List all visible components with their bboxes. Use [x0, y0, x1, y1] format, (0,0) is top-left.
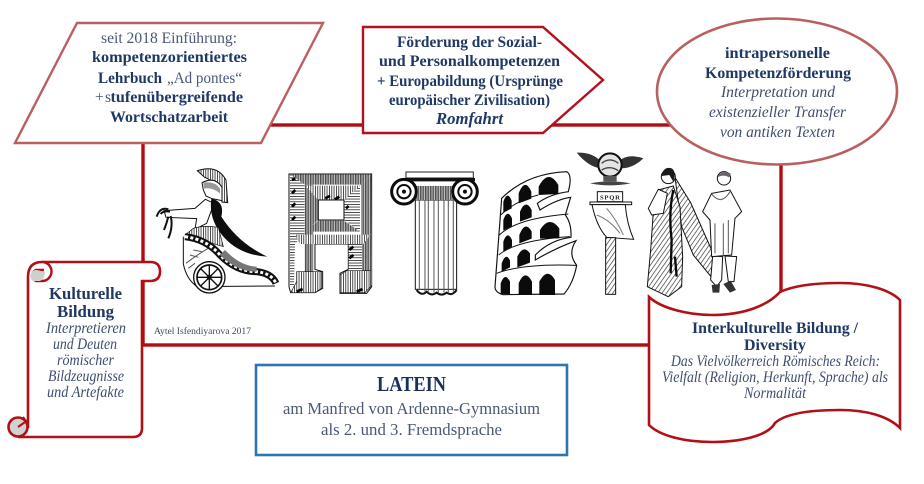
panel: LATEIN title box	[256, 365, 567, 455]
panel: intrapersonelle Kompetenzförderung ellipse	[657, 18, 897, 164]
illustration: LATEIN letters	[157, 153, 742, 297]
panel: Sozial- und Personalkompetenzen arrow: Förderung der Sozial-	[397, 34, 542, 51]
panel: Lehrbuch parallelogram	[15, 23, 323, 143]
panel: Lehrbuch parallelogram: tufenübergreifende	[110, 89, 243, 106]
panel: Lehrbuch parallelogram: +	[95, 89, 104, 106]
panel: intrapersonelle Kompetenzförderung ellipse: Kompetenzförderung	[705, 65, 851, 82]
panel: Kulturelle Bildung scroll: und Deuten	[53, 336, 117, 353]
letter I: SPQR signum: SPQR	[600, 194, 620, 201]
panel: LATEIN title box: als 2. und 3. Fremdsprache	[321, 420, 502, 439]
panel: Kulturelle Bildung scroll: Kulturelle	[49, 284, 122, 303]
letter T: ionic column	[392, 172, 477, 295]
letter N: Roman woman and man	[647, 168, 742, 297]
credit line: Aytel Isfendiyarova 2017	[154, 326, 251, 337]
letter I: SPQR signum	[577, 153, 643, 294]
panel: Interkulturelle Bildung wave: Das Vielvölkerreich Römisches Reich:	[670, 353, 880, 370]
panel: Kulturelle Bildung scroll: römischer	[57, 352, 115, 369]
panel: intrapersonelle Kompetenzförderung ellipse: Interpretation und	[720, 84, 835, 101]
panel: Kulturelle Bildung scroll: und Artefakte	[47, 384, 124, 401]
panel: LATEIN title box: LATEIN	[377, 372, 446, 396]
panel: Interkulturelle Bildung wave: Vielfalt (Religion, Herkunft, Sprache) als	[662, 369, 888, 386]
panel: Interkulturelle Bildung wave: Interkulturelle Bildung /	[692, 320, 859, 337]
panel: intrapersonelle Kompetenzförderung ellipse: existenzieller Transfer	[709, 104, 847, 121]
central frame	[143, 125, 781, 345]
panel: LATEIN title box: am Manfred von Ardenne-Gymnasium	[283, 399, 540, 418]
panel: Sozial- und Personalkompetenzen arrow: + Europabildung (Ursprünge	[377, 73, 563, 90]
panel: Kulturelle Bildung scroll: Bildung	[57, 302, 114, 321]
panel: Sozial- und Personalkompetenzen arrow: europäischer Zivilisation)	[389, 92, 550, 109]
panel: Kulturelle Bildung scroll: Bildzeugnisse	[48, 368, 124, 385]
panel: Kulturelle Bildung scroll: Interpretieren	[45, 320, 126, 337]
letter A: architectural block	[289, 174, 372, 293]
panel: Lehrbuch parallelogram: Lehrbuch	[98, 70, 162, 87]
panel: Lehrbuch parallelogram: „Ad pontes“	[167, 70, 242, 87]
panel: intrapersonelle Kompetenzförderung ellipse: von antiken Texten	[720, 124, 835, 141]
panel: Interkulturelle Bildung wave: Diversity	[744, 337, 806, 354]
panel: Lehrbuch parallelogram: seit 2018 Einführung:	[101, 30, 237, 47]
panel: Lehrbuch parallelogram: s	[105, 89, 111, 106]
panel: Sozial- und Personalkompetenzen arrow: und Personalkompetenzen	[379, 53, 560, 70]
panel: Kulturelle Bildung scroll	[8, 262, 160, 437]
letter E: colosseum	[495, 172, 577, 295]
panel: Interkulturelle Bildung wave: Normalität	[743, 385, 807, 402]
panel: Interkulturelle Bildung wave	[649, 283, 900, 442]
panel: Sozial- und Personalkompetenzen arrow	[363, 27, 603, 133]
panel: intrapersonelle Kompetenzförderung ellipse: intrapersonelle	[725, 45, 830, 62]
letter L: warrior in chariot	[157, 169, 276, 293]
panel: Sozial- und Personalkompetenzen arrow: Romfahrt	[435, 109, 503, 128]
panel: Lehrbuch parallelogram: kompetenzorientiertes	[92, 49, 247, 66]
panel: Lehrbuch parallelogram: Wortschatzarbeit	[110, 109, 229, 126]
